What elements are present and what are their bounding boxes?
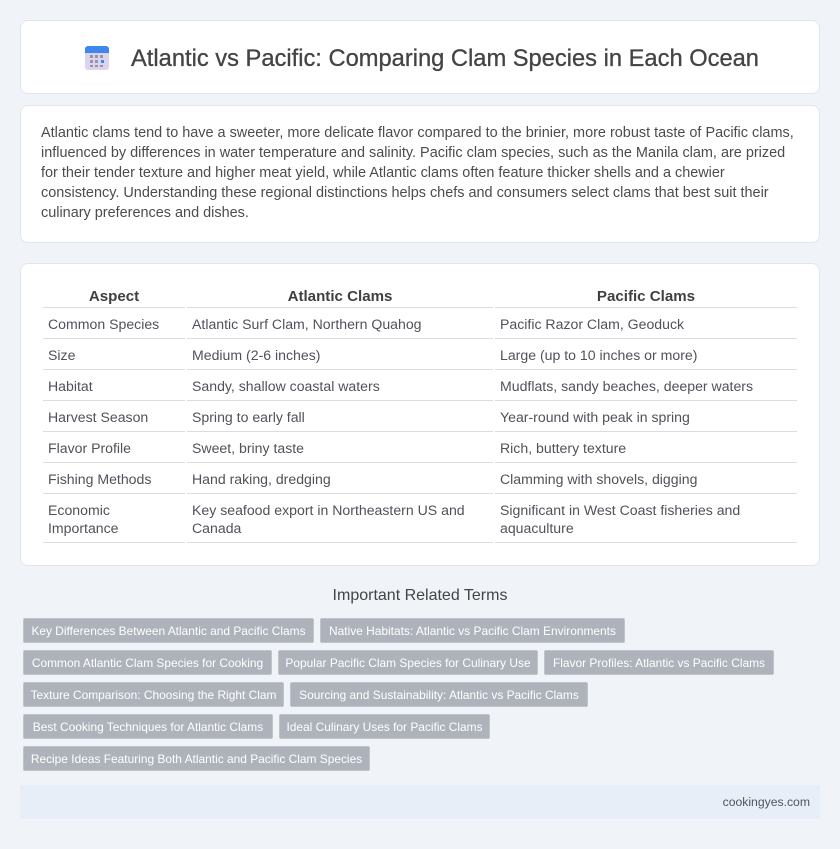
intro text: influenced by differences in water temperature and salinity. Pacific clam species, such as the Manila clam, are prized (41, 145, 785, 161)
comparison table: Economic (48, 502, 110, 518)
intro text: for their tender texture and higher meat yield, while Atlantic clams often feature thicker shells and a chewier (41, 165, 725, 181)
intro text: Atlantic clams tend to have a sweeter, more delicate flavor compared to the brinier, more robust taste of Pacific clams, (41, 125, 794, 141)
comparison table: Medium (2-6 inches) (192, 347, 320, 363)
comparison table: Sweet, briny taste (192, 440, 304, 456)
comparison table: Atlantic Surf Clam, Northern Quahog (192, 316, 422, 332)
comparison table: Large (up to 10 inches or more) (500, 347, 697, 363)
related terms tags: Flavor Profiles: Atlantic vs Pacific Clams (553, 656, 765, 670)
related terms tags: Native Habitats: Atlantic vs Pacific Clam Environments (329, 624, 616, 638)
comparison table: Size (48, 347, 75, 363)
related terms tags: Popular Pacific Clam Species for Culinary Use (285, 656, 531, 670)
comparison table (43, 288, 797, 543)
footer bar (20, 785, 820, 819)
related terms tags: Texture Comparison: Choosing the Right Clam (31, 688, 276, 702)
comparison table: Mudflats, sandy beaches, deeper waters (500, 378, 753, 394)
related terms tags: Best Cooking Techniques for Atlantic Clams (33, 720, 263, 734)
header panel (20, 20, 820, 94)
comparison table: Key seafood export in Northeastern US and (192, 502, 465, 518)
comparison table: Significant in West Coast fisheries and (500, 502, 740, 518)
related terms tags: Ideal Culinary Uses for Pacific Clams (286, 720, 483, 734)
comparison table: Fishing Methods (48, 471, 151, 487)
comparison table: aquaculture (500, 520, 574, 536)
title: Atlantic vs Pacific: Comparing Clam Species in Each Ocean (131, 46, 759, 72)
comparison table: Rich, buttery texture (500, 440, 626, 456)
comparison table: Hand raking, dredging (192, 471, 331, 487)
comparison table: Spring to early fall (192, 409, 305, 425)
comparison table: Harvest Season (48, 409, 148, 425)
comparison table: Pacific Clams (597, 288, 695, 305)
intro panel (20, 105, 820, 243)
comparison table panel (20, 263, 820, 566)
comparison table: Flavor Profile (48, 440, 131, 456)
comparison table: Atlantic Clams (288, 288, 392, 305)
comparison table: Common Species (48, 316, 159, 332)
comparison table: Clamming with shovels, digging (500, 471, 697, 487)
icon: calendar (85, 46, 109, 70)
intro text: consistency. Understanding these regional distinctions helps chefs and consumers select clams that best suit their (41, 185, 769, 201)
intro text: culinary preferences and dishes. (41, 205, 249, 221)
comparison table: Sandy, shallow coastal waters (192, 378, 380, 394)
comparison table: Canada (192, 520, 241, 536)
related terms heading: Important Related Terms (333, 587, 507, 604)
related terms tags: Sourcing and Sustainability: Atlantic vs Pacific Clams (299, 688, 579, 702)
intro text (41, 125, 794, 221)
footer source text: cookingyes.com (723, 795, 810, 809)
related terms tags: Recipe Ideas Featuring Both Atlantic and Pacific Clam Species (31, 752, 362, 766)
related terms tags: Common Atlantic Clam Species for Cooking (32, 656, 263, 670)
comparison table: Year-round with peak in spring (500, 409, 690, 425)
related terms tags (23, 618, 774, 771)
comparison table: Habitat (48, 378, 93, 394)
comparison table: Pacific Razor Clam, Geoduck (500, 316, 684, 332)
comparison table: Importance (48, 520, 119, 536)
comparison table: Aspect (89, 288, 139, 305)
related terms tags: Key Differences Between Atlantic and Pacific Clams (31, 624, 306, 638)
